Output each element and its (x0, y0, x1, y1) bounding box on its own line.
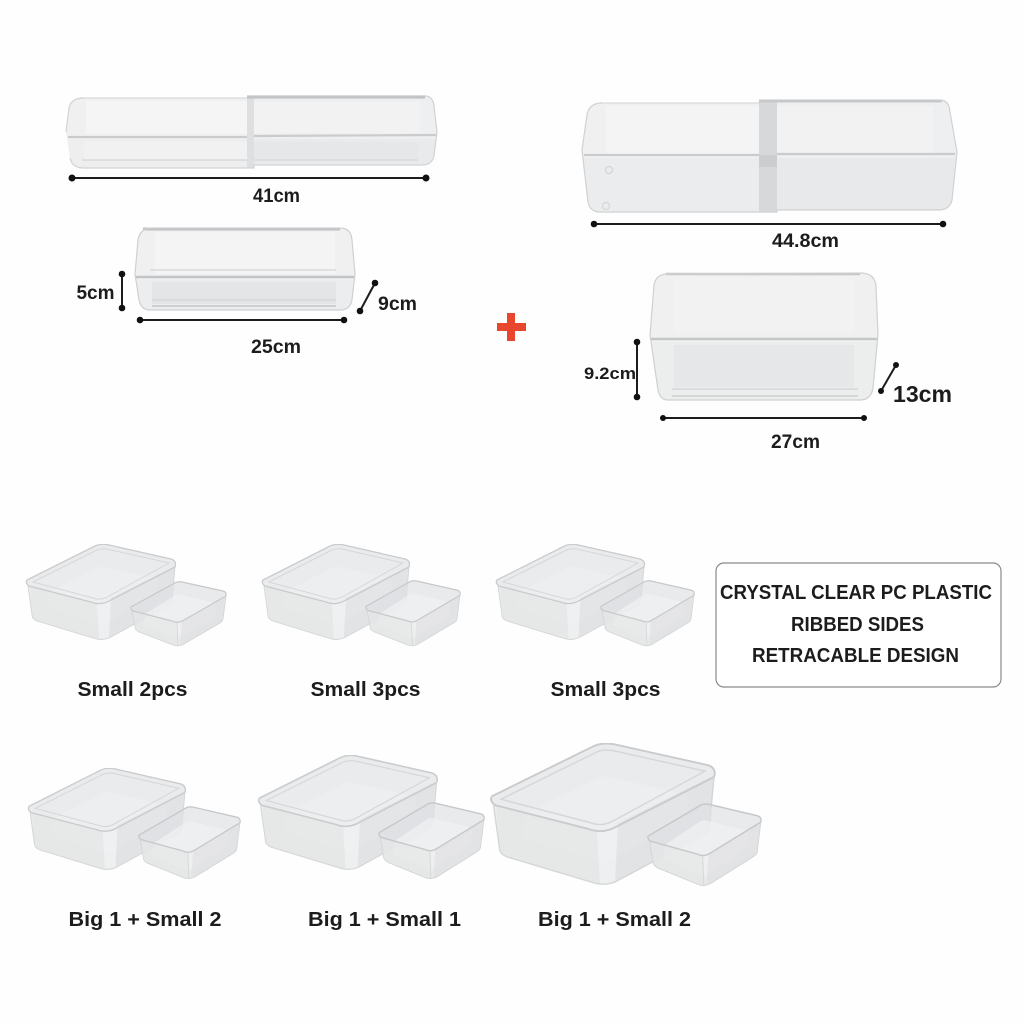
set: Big 1 + Small 1: Big 1 + Small 1 (308, 908, 461, 931)
set: Small 3pcs (second): Small 3pcs (550, 678, 660, 701)
icon: red plus sign (497, 313, 526, 341)
dimension: 9cm depth: 9cm (378, 293, 417, 315)
callout: material and design features: RIBBED SIDES (791, 613, 924, 636)
product: 44.8cm large retractable tray (582, 100, 957, 212)
set: Small 3pcs (first): Small 3pcs (310, 678, 420, 701)
dimension: 41cm (68, 174, 430, 207)
dimension: 5cm height (76, 271, 125, 311)
dimension: 13cm depth: 13cm (893, 381, 952, 407)
callout: material and design features: CRYSTAL CLEAR PC PLASTIC (720, 581, 992, 604)
dimension: 9cm depth (357, 280, 417, 315)
dimension: 25cm width: 25cm (251, 336, 301, 358)
dimension: 5cm height: 5cm (76, 282, 114, 304)
dimension: 27cm width (660, 415, 867, 453)
set: Big 1 + Small 1 (258, 755, 484, 931)
dimension: 9.2cm height: 9.2cm (584, 364, 636, 383)
dimension: 25cm width (137, 317, 347, 358)
set: Big 1 + Small 2 (first) (28, 768, 240, 931)
product: 27cm deep tray (650, 273, 878, 400)
callout: material and design features (716, 563, 1001, 687)
callout: material and design features: RETRACABLE DESIGN (752, 644, 959, 667)
set: Big 1 + Small 2 (second) (491, 743, 761, 931)
dimension: 13cm depth (878, 362, 952, 407)
set: Big 1 + Small 2 (second): Big 1 + Small 2 (538, 908, 691, 931)
dimension: 44.8cm (591, 221, 946, 252)
set: Big 1 + Small 2 (first): Big 1 + Small 2 (68, 908, 222, 931)
set: Small 2pcs: Small 2pcs (78, 678, 188, 701)
dimension: 41cm: 41cm (253, 185, 300, 207)
dimension: 27cm width: 27cm (771, 431, 820, 453)
dimension: 9.2cm height (584, 339, 640, 400)
set: Small 3pcs (first) (262, 544, 460, 701)
dimension: 44.8cm: 44.8cm (772, 230, 839, 252)
product: 25cm small tray (135, 228, 355, 310)
set: Small 2pcs (26, 544, 226, 701)
set: Small 3pcs (second) (496, 544, 694, 701)
product: 41cm long retractable tray (66, 96, 437, 168)
